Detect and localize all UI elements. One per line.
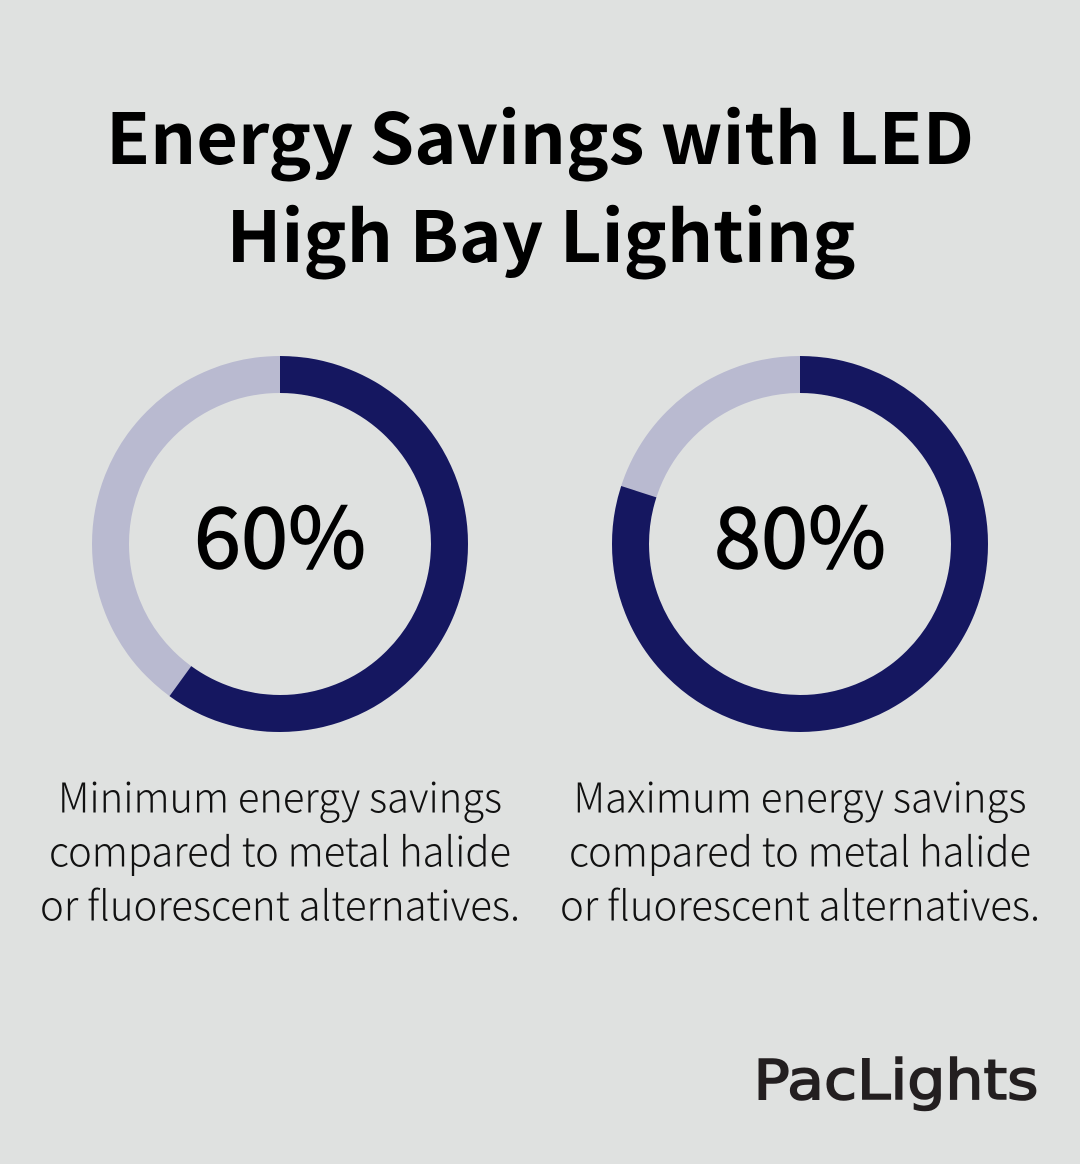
caption: minimum savings: or fluorescent alternatives. [40,872,520,932]
caption: minimum savings [40,764,520,932]
title [106,83,974,283]
title: Energy Savings with LED [106,83,974,185]
value: 60%: 60% [194,472,366,593]
donut chart: 60% [110,374,450,714]
caption: maximum savings [560,764,1040,932]
caption: minimum savings: Minimum energy savings [58,764,502,824]
caption: maximum savings: or fluorescent alternatives. [560,872,1040,932]
panel: 80% maximum savings [560,374,1040,932]
panel: 60% minimum savings [40,374,520,932]
donut chart: 80% [630,374,970,714]
caption: minimum savings: compared to metal halide [49,818,511,878]
title: High Bay Lighting [226,181,856,283]
caption: maximum savings: Maximum energy savings [574,764,1026,824]
value: 80%: 80% [714,472,886,593]
logo: PacLights: PacLights [754,1048,1038,1112]
caption: maximum savings: compared to metal halide [569,818,1031,878]
